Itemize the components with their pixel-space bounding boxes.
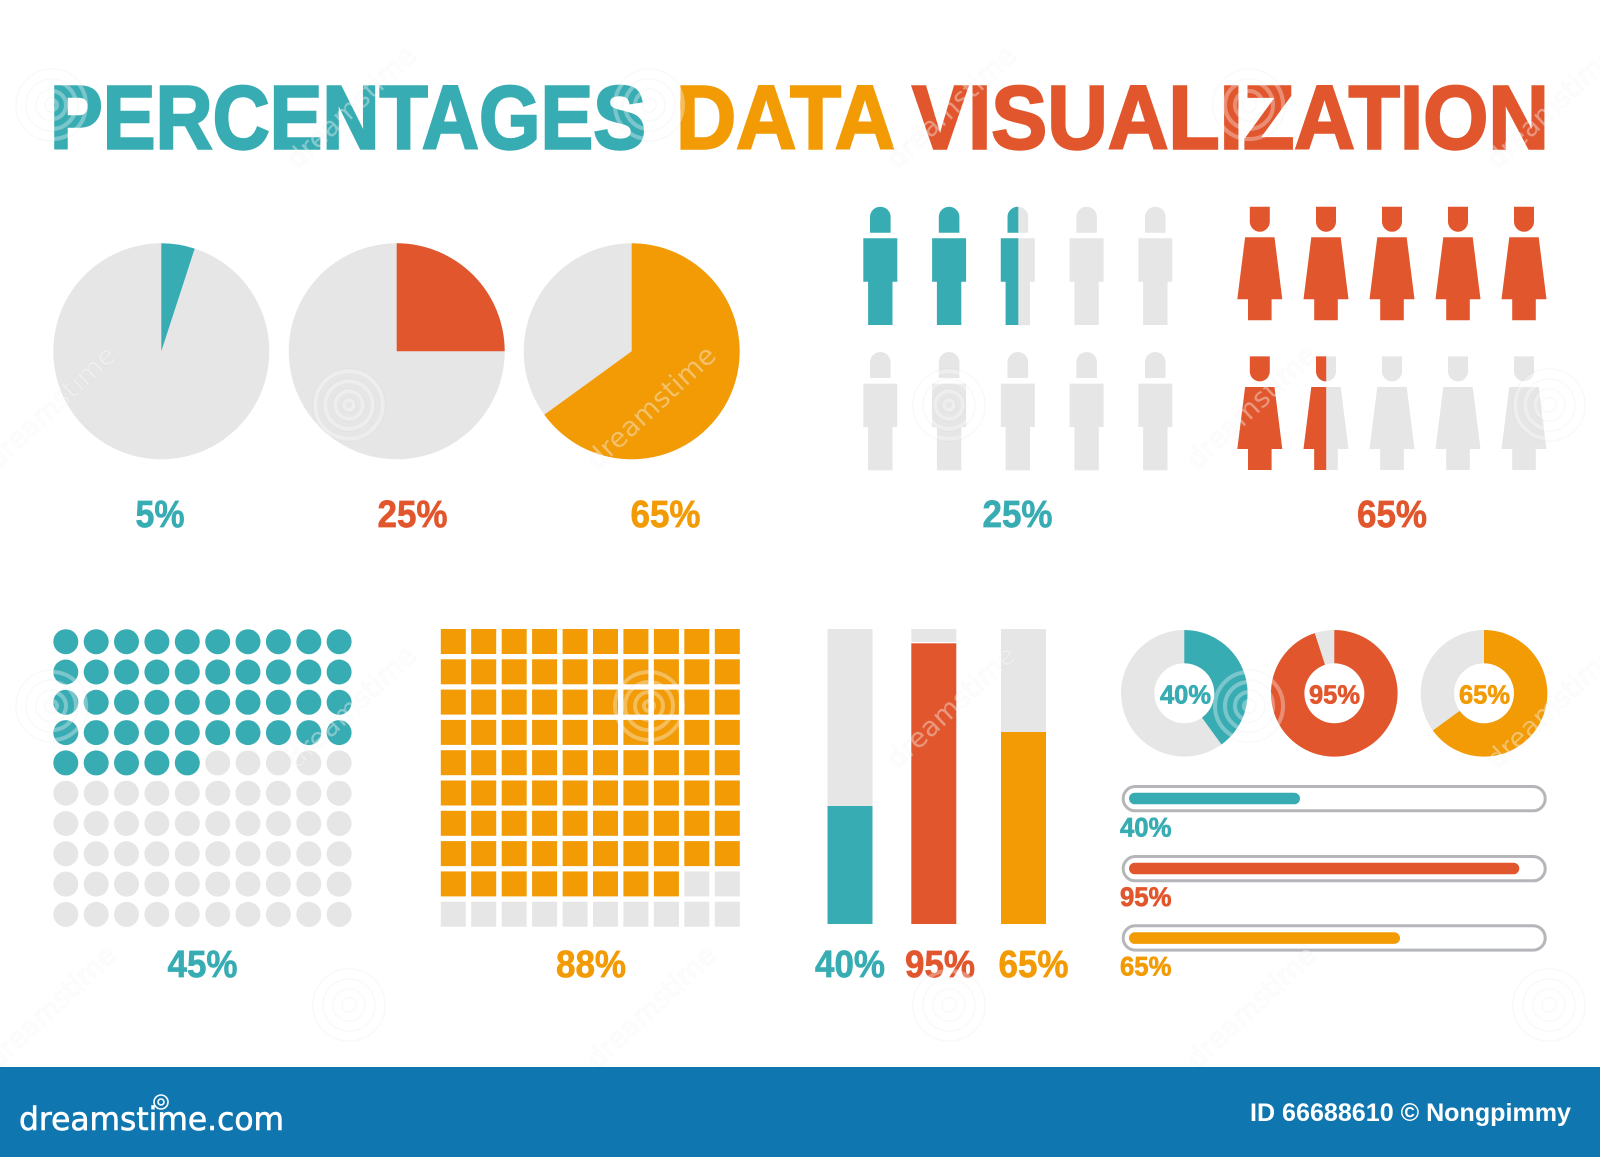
bar: 95% [911,629,956,924]
watermark overlay: dreamstime [581,940,722,1075]
watermark overlay: dreamstime [881,40,1022,175]
watermark overlay: dreamstime [281,640,422,775]
title: DATA [676,69,895,169]
label: 40%: 40% [815,944,885,986]
icon row: men top [863,207,1172,325]
panel: progress bars [1120,786,1545,982]
pie chart: 65% [524,243,740,459]
label: 5%: 5% [136,494,184,536]
bar: 65% [1001,629,1046,924]
progress bar: 95%: 95% [1120,882,1172,912]
footer credit: ID 66688610 © Nongpimmy [1250,1099,1571,1127]
watermark overlay: dreamstime [281,40,422,175]
watermark overlay: dreamstime [581,340,722,475]
pie chart: 25% [289,243,505,459]
watermark overlay: dreamstime [1181,340,1322,475]
label: 45%: 45% [168,944,238,986]
panel: female pictograms 65% [1237,207,1546,536]
empty squares [441,871,740,927]
donut: 40% [1138,630,1248,744]
icon: spiral logo [154,1095,168,1109]
title: VISUALIZATION [912,69,1549,169]
footer bar [0,1067,1600,1157]
panel: square grid 88% [441,629,740,986]
panel: dot grid 45% [53,629,352,986]
panel: pie charts [53,243,740,536]
filled squares [441,629,740,896]
label: 65%: 65% [1357,494,1427,536]
watermark overlay: dreamstime [1181,940,1322,1075]
label: 88%: 88% [556,944,626,986]
label: 65%: 65% [998,944,1068,986]
label: 65%: 65% [630,494,700,536]
icon row: men bottom [863,352,1172,470]
title [50,69,1549,169]
panel: male pictograms 25% [863,207,1172,536]
footer logo text: dreamstime.com [19,1100,284,1138]
donut: 95% [1271,630,1398,757]
bar: 40% [828,629,872,924]
watermark overlay: dreamstime [881,640,1022,775]
panel: donut charts [1138,630,1547,757]
donut: 40%: 40% [1160,679,1211,709]
progress bar: 40% [1120,786,1545,843]
donut: 95%: 95% [1309,679,1360,709]
pie chart: 5% [53,243,269,459]
label: 25%: 25% [378,494,448,536]
label: 95%: 95% [905,944,975,986]
icon row: women top [1237,207,1546,320]
progress bar: 40%: 40% [1120,813,1172,843]
empty dots [53,750,352,927]
icon row: women bottom [1237,356,1546,470]
title: PERCENTAGES [50,69,646,169]
donut: 65%: 65% [1459,679,1510,709]
label: 25%: 25% [982,494,1052,536]
panel: vertical bars [815,629,1068,986]
donut: 65% [1433,630,1547,757]
progress bar: 95% [1120,856,1545,912]
progress bar: 65% [1120,926,1545,982]
progress bar: 65%: 65% [1120,952,1172,982]
filled dots [53,629,352,775]
